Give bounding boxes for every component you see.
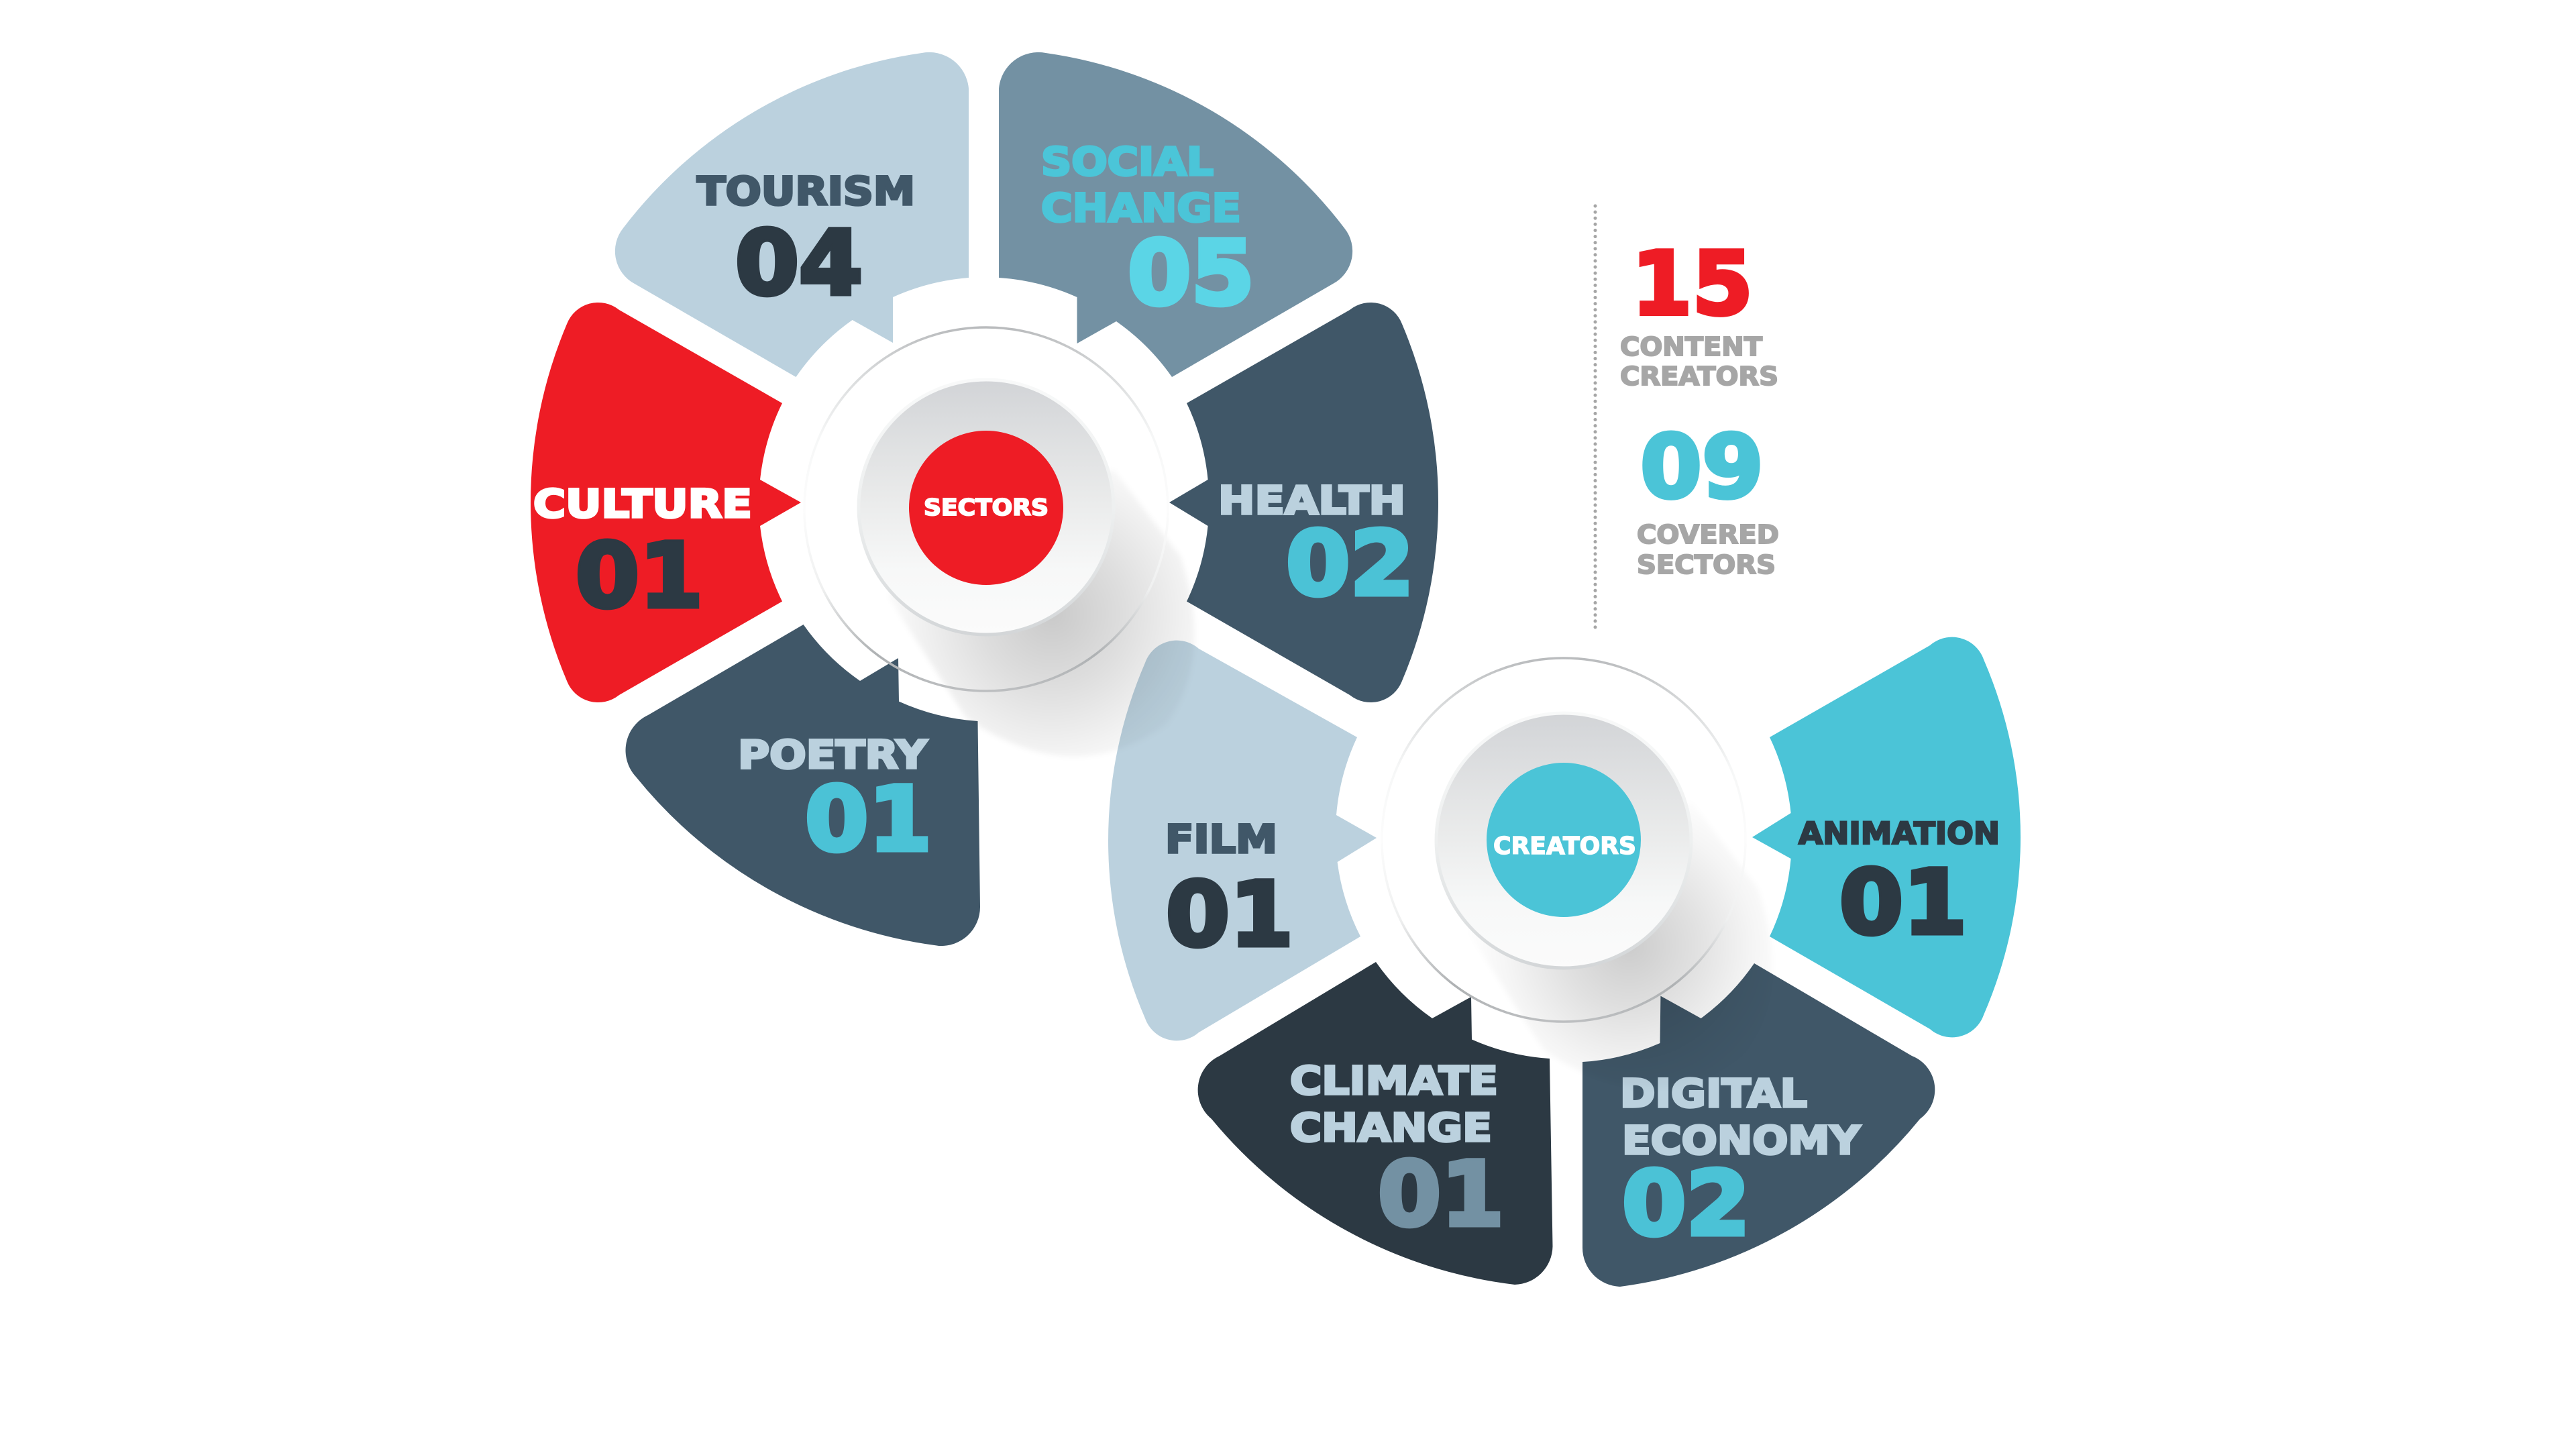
- animation count: 01: [1839, 851, 1967, 955]
- stat number 15: 15: [1631, 233, 1753, 335]
- panel: tourism segment: [615, 52, 969, 377]
- poetry count: 01: [805, 768, 932, 871]
- hub: creators: [1382, 658, 1772, 1089]
- animation wedge: [1752, 637, 2021, 1037]
- health wedge: [1169, 303, 1438, 702]
- panel: animation segment: [1752, 637, 2021, 1037]
- climate change wedge: [1198, 962, 1552, 1285]
- stat caption line 2: CREATORS: [1620, 362, 1778, 391]
- sectors long shadow: [888, 470, 1195, 757]
- health count: 02: [1286, 513, 1414, 616]
- creators blue core: [1487, 763, 1641, 917]
- culture count: 01: [576, 525, 703, 628]
- panel: poetry segment: [626, 625, 980, 946]
- hub: sectors: [804, 327, 1195, 757]
- health label: HEALTH: [1218, 478, 1405, 523]
- creators long shadow: [1465, 802, 1772, 1089]
- climate change count: 01: [1378, 1143, 1504, 1246]
- social change label line 2: CHANGE: [1041, 185, 1241, 231]
- stat number 09: 09: [1640, 416, 1764, 518]
- animation label: ANIMATION: [1799, 816, 2000, 851]
- panel: health segment: [1169, 303, 1438, 702]
- film label: FILM: [1165, 816, 1277, 862]
- creators plate: [1436, 713, 1691, 968]
- panel: social change segment: [999, 52, 1352, 377]
- social change count: 05: [1128, 222, 1254, 325]
- stat caption line 2: SECTORS: [1637, 550, 1776, 580]
- panel: digital economy segment: [1582, 963, 1935, 1287]
- film wedge: [1108, 641, 1377, 1040]
- stat: content creators: [1620, 233, 1778, 391]
- culture label: CULTURE: [533, 481, 752, 527]
- tourism wedge: [615, 52, 969, 377]
- tourism count: 04: [735, 212, 863, 315]
- sectors label: SECTORS: [924, 494, 1049, 521]
- creators glass ring: [1382, 658, 1746, 1022]
- sectors plate: [859, 380, 1114, 635]
- sectors glass ring: [804, 327, 1168, 691]
- poetry wedge: [626, 625, 980, 946]
- culture wedge: [531, 303, 801, 702]
- stat: covered sectors: [1637, 416, 1779, 580]
- digital economy wedge: [1582, 963, 1935, 1287]
- climate change label: CLIMATE: [1290, 1058, 1498, 1104]
- dotted divider: [1594, 206, 1597, 629]
- digital economy count: 02: [1622, 1152, 1750, 1256]
- creators label: CREATORS: [1493, 833, 1636, 860]
- film count: 01: [1166, 863, 1293, 967]
- digital economy label: DIGITAL: [1620, 1071, 1807, 1116]
- climate change label line 2: CHANGE: [1290, 1105, 1492, 1150]
- tourism label: TOURISM: [697, 168, 915, 214]
- social change label: SOCIAL: [1041, 139, 1214, 184]
- panel: climate change segment: [1198, 962, 1552, 1285]
- stat caption line 1: CONTENT: [1620, 332, 1762, 362]
- sectors red core: [909, 431, 1063, 585]
- panel: culture segment: [531, 303, 801, 702]
- poetry label: POETRY: [738, 732, 928, 777]
- social change wedge: [999, 52, 1352, 377]
- digital economy label line 2: ECONOMY: [1622, 1118, 1861, 1163]
- panel: film segment: [1108, 641, 1377, 1040]
- stat caption line 1: COVERED: [1637, 520, 1779, 549]
